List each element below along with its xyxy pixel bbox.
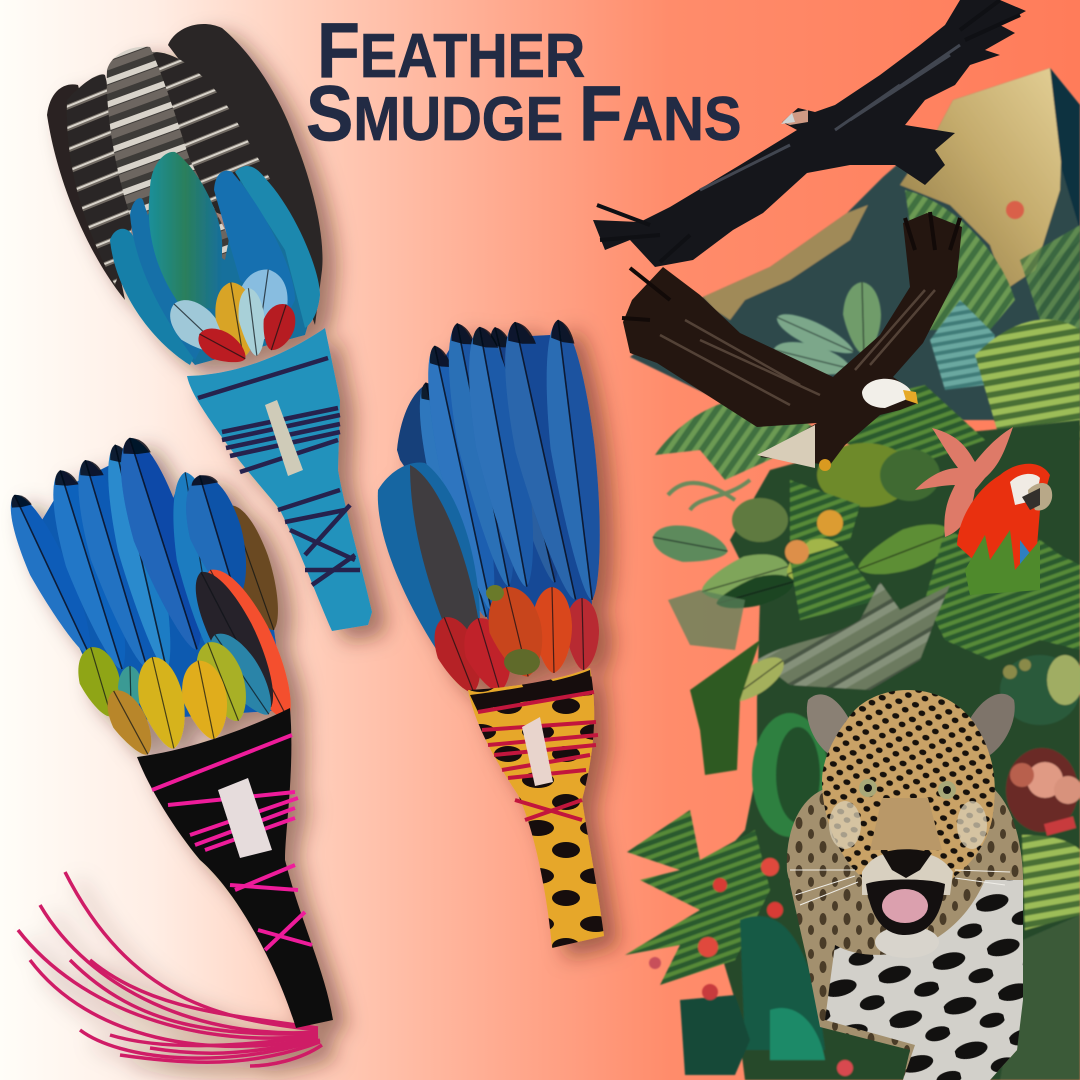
nose — [882, 849, 932, 878]
mouth — [866, 880, 945, 935]
crystal — [265, 400, 303, 476]
crystal — [522, 717, 553, 786]
curved green ring — [752, 713, 828, 837]
dark striped feathers — [47, 24, 323, 325]
jaguar — [787, 690, 1023, 1080]
red base feathers — [426, 582, 599, 699]
pink leather tassels — [18, 872, 322, 1066]
title line 1: FEATHER — [317, 7, 585, 94]
upper ferns and broad leaves — [655, 190, 1080, 480]
mountain — [630, 68, 1080, 420]
jaguar chest and forelimb — [825, 880, 1023, 1080]
tongue — [882, 889, 928, 923]
right ear — [968, 694, 1015, 755]
dark cord wrap — [198, 358, 360, 585]
lime monstera — [1022, 835, 1080, 930]
branch with small leaves — [668, 480, 750, 510]
fan palm — [925, 525, 1080, 660]
grey-green leaves — [757, 582, 950, 690]
jungle and mountain scene — [593, 0, 1080, 1080]
right-side foliage — [1000, 655, 1080, 725]
turquoise handle — [187, 328, 372, 631]
yellow-green base feathers — [71, 635, 257, 763]
magenta cord wrap — [152, 735, 312, 950]
muzzle — [862, 854, 953, 895]
nose bridge — [870, 798, 942, 850]
blue feathers — [0, 430, 309, 732]
dense foliage mass — [625, 201, 1080, 1080]
chin — [875, 926, 939, 958]
title line 2: SMUDGE FANS — [306, 69, 741, 157]
blue feathers — [378, 317, 612, 655]
jaguar ears — [807, 694, 852, 755]
blue macaw feathers — [110, 152, 320, 365]
eyes — [859, 779, 956, 799]
dark upper handle — [470, 670, 592, 712]
red cord wrap — [478, 692, 598, 820]
pink blossoms — [1006, 748, 1078, 832]
fan 2: blue feathers with leopard handle — [378, 317, 612, 948]
white cheeks — [829, 801, 987, 849]
title — [306, 7, 741, 157]
black handle — [137, 708, 333, 1028]
leopard handle — [468, 668, 604, 948]
red lily — [915, 427, 1013, 537]
bald eagle — [622, 212, 962, 471]
grass bottom left — [625, 810, 770, 985]
fan 3: macaw feathers with black handle and pink cords — [0, 430, 333, 1066]
red and yellow base feathers — [160, 265, 301, 373]
jaguar body — [787, 790, 1023, 1080]
jaguar head — [822, 690, 995, 880]
condor — [593, 0, 1026, 267]
fruit flowers — [817, 510, 843, 536]
dark teal monsteras — [740, 916, 825, 1050]
whiskers — [790, 870, 1010, 905]
fan 1: turkey and macaw feathers with turquoise handle — [47, 24, 372, 631]
crystal — [218, 778, 272, 858]
macaw — [957, 464, 1052, 595]
